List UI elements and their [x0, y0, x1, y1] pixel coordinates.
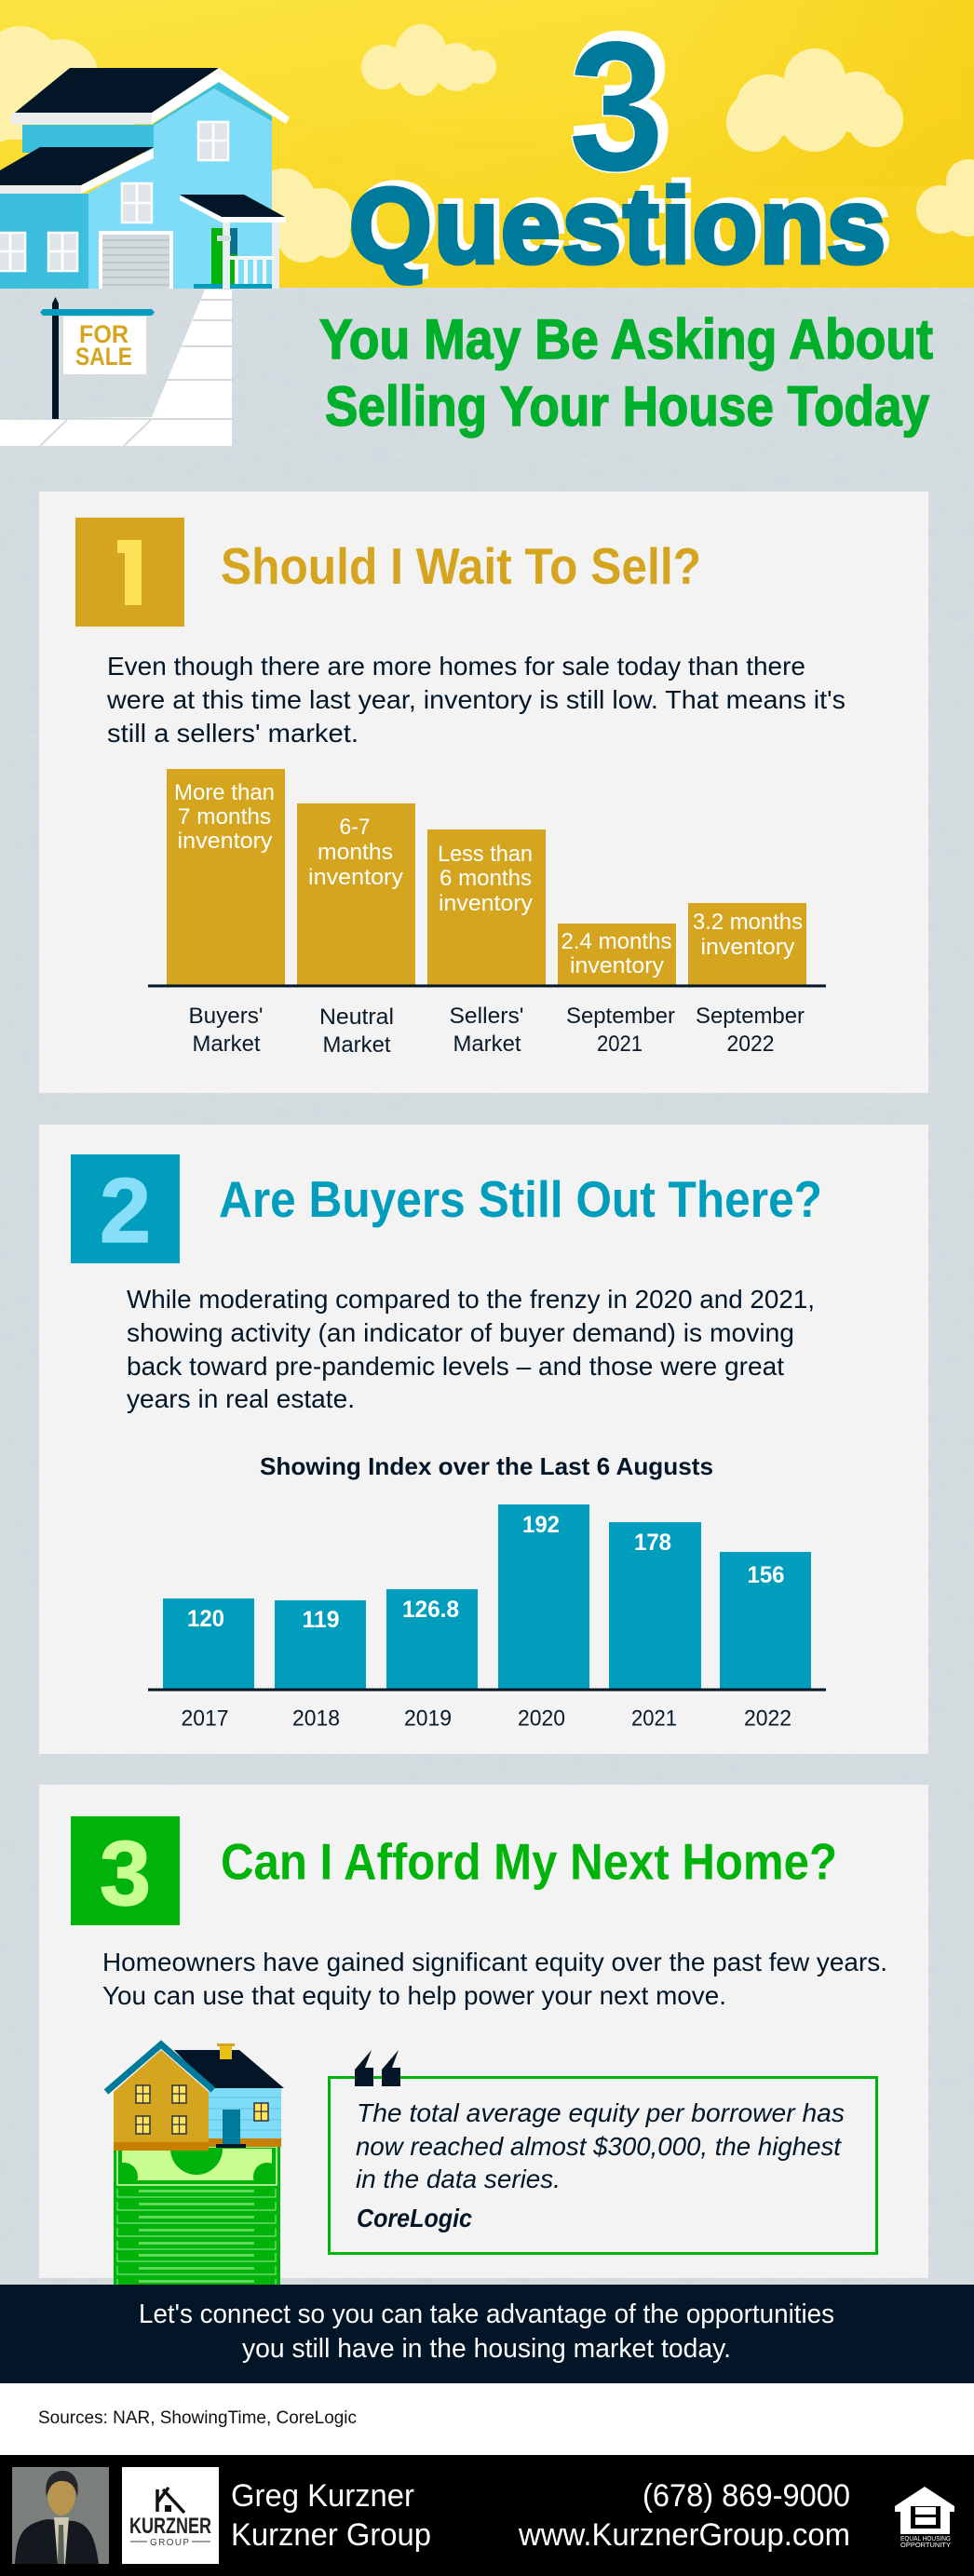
bar chart: months of inventory: 2021 [597, 1032, 643, 1057]
icon: house on stack of money [106, 2043, 284, 2285]
header: yellow sky [0, 0, 974, 288]
panel 2: are buyers still out there [39, 1125, 928, 1754]
quote text: now reached almost $300,000, the highest [356, 2132, 842, 2161]
quote source: CoreLogic [357, 2204, 472, 2232]
bar chart: months of inventory: 2.4 months [561, 929, 672, 954]
contact details: www.KurznerGroup.com [518, 2517, 850, 2553]
body text 3 [102, 1948, 887, 2010]
cloud: far right [916, 159, 974, 236]
body text 2: back toward pre-pandemic levels – and those were great [127, 1352, 784, 1381]
title: Questions: Questions [349, 168, 886, 286]
bar chart: months of inventory: Market [453, 1032, 521, 1057]
bar chart: showing index: 119 [302, 1607, 339, 1633]
bar chart: months of inventory: Buyers' [188, 1004, 263, 1029]
bar chart: months of inventory: inventory [439, 891, 533, 916]
quote text [356, 2098, 845, 2193]
number badge 2: 2 [100, 1159, 151, 1261]
bar chart: months of inventory: 2022 [726, 1032, 775, 1057]
title: 3: 3 [574, 0, 670, 205]
bar chart: showing index: 192 [522, 1512, 560, 1538]
bar chart: showing index: 126.8 [402, 1597, 459, 1623]
bar chart: months of inventory: Less than [438, 842, 533, 867]
cloud: right [726, 48, 903, 152]
agent name [231, 2478, 431, 2553]
bar chart: showing index: 2021 [631, 1706, 677, 1732]
bar chart: months of inventory: September [696, 1004, 805, 1029]
bar chart: showing index: 2017 [181, 1706, 229, 1732]
call to action band: you still have in the housing market today. [242, 2334, 731, 2364]
bar chart: months of inventory: 6 months [440, 866, 532, 891]
number badge 3: 3 [100, 1822, 151, 1924]
bar chart: months of inventory: inventory [570, 953, 664, 978]
panel 1: should I wait to sell [39, 492, 928, 1093]
body text 2: showing activity (an indicator of buyer demand) is moving [127, 1318, 794, 1347]
bar chart: showing index [148, 1504, 826, 1732]
contact details [518, 2478, 850, 2553]
body text 1: still a sellers' market. [107, 719, 358, 748]
agent name: Greg Kurzner [231, 2478, 414, 2514]
house illustration [0, 68, 290, 289]
body text 2: years in real estate. [127, 1384, 355, 1413]
subtitle [319, 308, 933, 438]
company logo: KURZNER [129, 2514, 211, 2539]
panel 3: can I afford my next home [39, 1785, 928, 2278]
bar chart: months of inventory: inventory [177, 829, 272, 854]
bar chart: months of inventory: inventory [700, 935, 795, 960]
bar chart: months of inventory: Market [322, 1032, 391, 1058]
icon: equal housing opportunity: EQUAL HOUSING [900, 2536, 951, 2542]
bar chart: showing index: 156 [747, 1562, 784, 1588]
body text 2 [127, 1285, 815, 1413]
footer bar [0, 2455, 974, 2576]
quote box [330, 2050, 877, 2253]
page background [0, 288, 974, 2285]
bar chart: months of inventory: 7 months [178, 804, 271, 829]
heading 2: Are Buyers Still Out There? [219, 1170, 822, 1228]
body text 2: While moderating compared to the frenzy in 2020 and 2021, [127, 1285, 815, 1314]
call to action band [0, 2285, 974, 2383]
heading 1: Should I Wait To Sell? [221, 537, 701, 595]
agent photo [12, 2467, 109, 2564]
bar chart: showing index: 120 [187, 1606, 224, 1632]
number badge 2 [71, 1154, 180, 1263]
bar chart: months of inventory [148, 769, 826, 1058]
number badge 3 [71, 1816, 180, 1925]
sources strip: Sources: NAR, ShowingTime, CoreLogic [38, 2408, 357, 2428]
bar chart: months of inventory: inventory [308, 865, 403, 890]
sources strip [0, 2383, 974, 2455]
title: Questions: Questions [355, 162, 891, 280]
bar chart: months of inventory: Market [192, 1032, 261, 1057]
number badge 1 [75, 518, 184, 627]
quote text: The total average equity per borrower has [357, 2098, 845, 2127]
call to action band: Let's connect so you can take advantage of the opportunities [139, 2300, 834, 2329]
bar chart: months of inventory: More than [174, 780, 275, 805]
bar chart: months of inventory: months [318, 840, 393, 865]
bar chart: showing index: 2019 [404, 1706, 452, 1732]
quote text: in the data series. [356, 2165, 561, 2193]
heading 3: Can I Afford My Next Home? [221, 1832, 837, 1890]
bar chart: showing index: 2022 [744, 1706, 791, 1732]
icon: equal housing opportunity: OPPORTUNITY [900, 2542, 951, 2549]
company logo [122, 2467, 219, 2564]
for sale sign: SALE [75, 343, 132, 371]
for sale sign [40, 297, 155, 419]
cloud: behind house [252, 169, 352, 263]
bar chart: months of inventory: September [566, 1004, 675, 1029]
body text 3: Homeowners have gained significant equity over the past few years. [102, 1948, 887, 1976]
chart title: Showing Index over the Last 6 Augusts [260, 1452, 713, 1480]
contact details: (678) 869-9000 [643, 2478, 850, 2514]
body text 3: You can use that equity to help power your next move. [102, 1981, 726, 2010]
bar chart: months of inventory: 3.2 months [693, 910, 803, 935]
body text 1 [106, 652, 845, 748]
bar chart: months of inventory: 6-7 [339, 815, 371, 840]
for sale sign: FOR [79, 320, 129, 348]
body text 1: Even though there are more homes for sale today than there [107, 652, 805, 681]
title: 3: 3 [568, 3, 665, 210]
sidewalk [0, 290, 232, 446]
cloud: top left [0, 26, 140, 142]
bar chart: showing index: 2018 [292, 1706, 340, 1732]
agent name: Kurzner Group [231, 2517, 431, 2553]
bar chart: months of inventory: Neutral [319, 1005, 394, 1030]
bar chart: showing index: 178 [634, 1530, 671, 1556]
company logo: GROUP [150, 2538, 189, 2548]
bar chart: months of inventory: Sellers' [449, 1004, 523, 1029]
bar chart: showing index: 2020 [518, 1706, 565, 1732]
quotation marks [355, 2050, 400, 2086]
icon: equal housing opportunity [895, 2487, 954, 2549]
cloud: centre [361, 24, 496, 96]
body text 1: were at this time last year, inventory is still low. That means it's [106, 685, 845, 714]
